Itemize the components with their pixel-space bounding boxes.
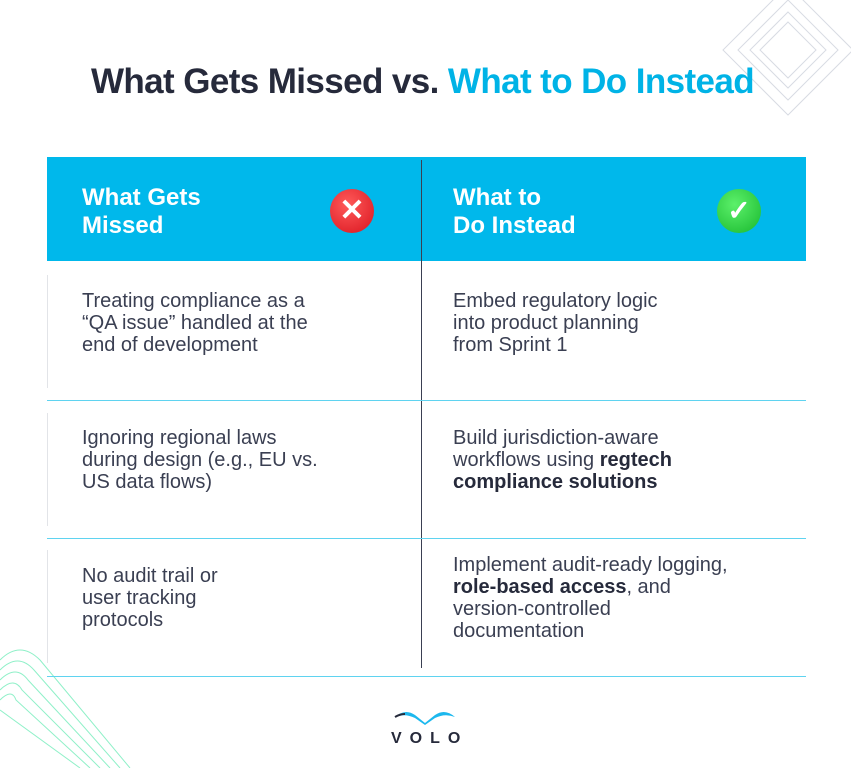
row 2 left: during design (e.g., EU vs. <box>82 449 318 471</box>
header bar <box>47 157 806 261</box>
header: what gets missed: Missed <box>82 212 163 239</box>
row 1 left <box>82 290 308 356</box>
header: what to do instead: What to <box>453 184 541 211</box>
row 1 left: “QA issue” handled at the <box>82 312 308 334</box>
icon: red x: ✕ <box>339 194 365 227</box>
header: what to do instead <box>453 184 576 239</box>
row 3 right: Implement audit-ready logging, <box>453 554 728 576</box>
row 3 right <box>453 554 728 642</box>
header: what gets missed <box>82 184 201 239</box>
row 3 right: version-controlled <box>453 598 611 620</box>
row 3 left: user tracking <box>82 587 196 609</box>
row 1 right: Embed regulatory logic <box>453 290 658 312</box>
title: What Gets Missed vs. What to Do Instead <box>91 62 754 101</box>
row 1 right: from Sprint 1 <box>453 334 567 356</box>
row 2 right: Build jurisdiction-aware <box>453 427 659 449</box>
row 1 left: Treating compliance as a <box>82 290 305 312</box>
row 2 left: Ignoring regional laws <box>82 427 277 449</box>
row 3 left: protocols <box>82 609 163 631</box>
logo: VOLO <box>391 730 468 747</box>
row 2 right: workflows using regtech <box>453 449 672 471</box>
row 1 right: into product planning <box>453 312 639 334</box>
row 2 right: compliance solutions <box>453 471 657 493</box>
icon: red x <box>330 189 374 233</box>
row 1 right <box>453 290 658 356</box>
icon: green check: ✓ <box>727 195 751 226</box>
decoration: top-right diamonds <box>722 0 851 116</box>
row 1 left: end of development <box>82 334 258 356</box>
row 3 left <box>82 565 218 631</box>
icon: green check <box>717 189 761 233</box>
header: what gets missed: What Gets <box>82 184 201 211</box>
row 2 right <box>453 427 672 493</box>
column divider <box>421 160 422 668</box>
row 2 left <box>82 427 318 493</box>
row 3 left: No audit trail or <box>82 565 218 587</box>
header: what to do instead: Do Instead <box>453 212 576 239</box>
decoration: bottom-left lines <box>0 650 130 768</box>
row 2 left: US data flows) <box>82 471 212 493</box>
logo <box>391 712 468 747</box>
row 3 right: documentation <box>453 620 584 642</box>
row 3 right: role-based access, and <box>453 576 671 598</box>
